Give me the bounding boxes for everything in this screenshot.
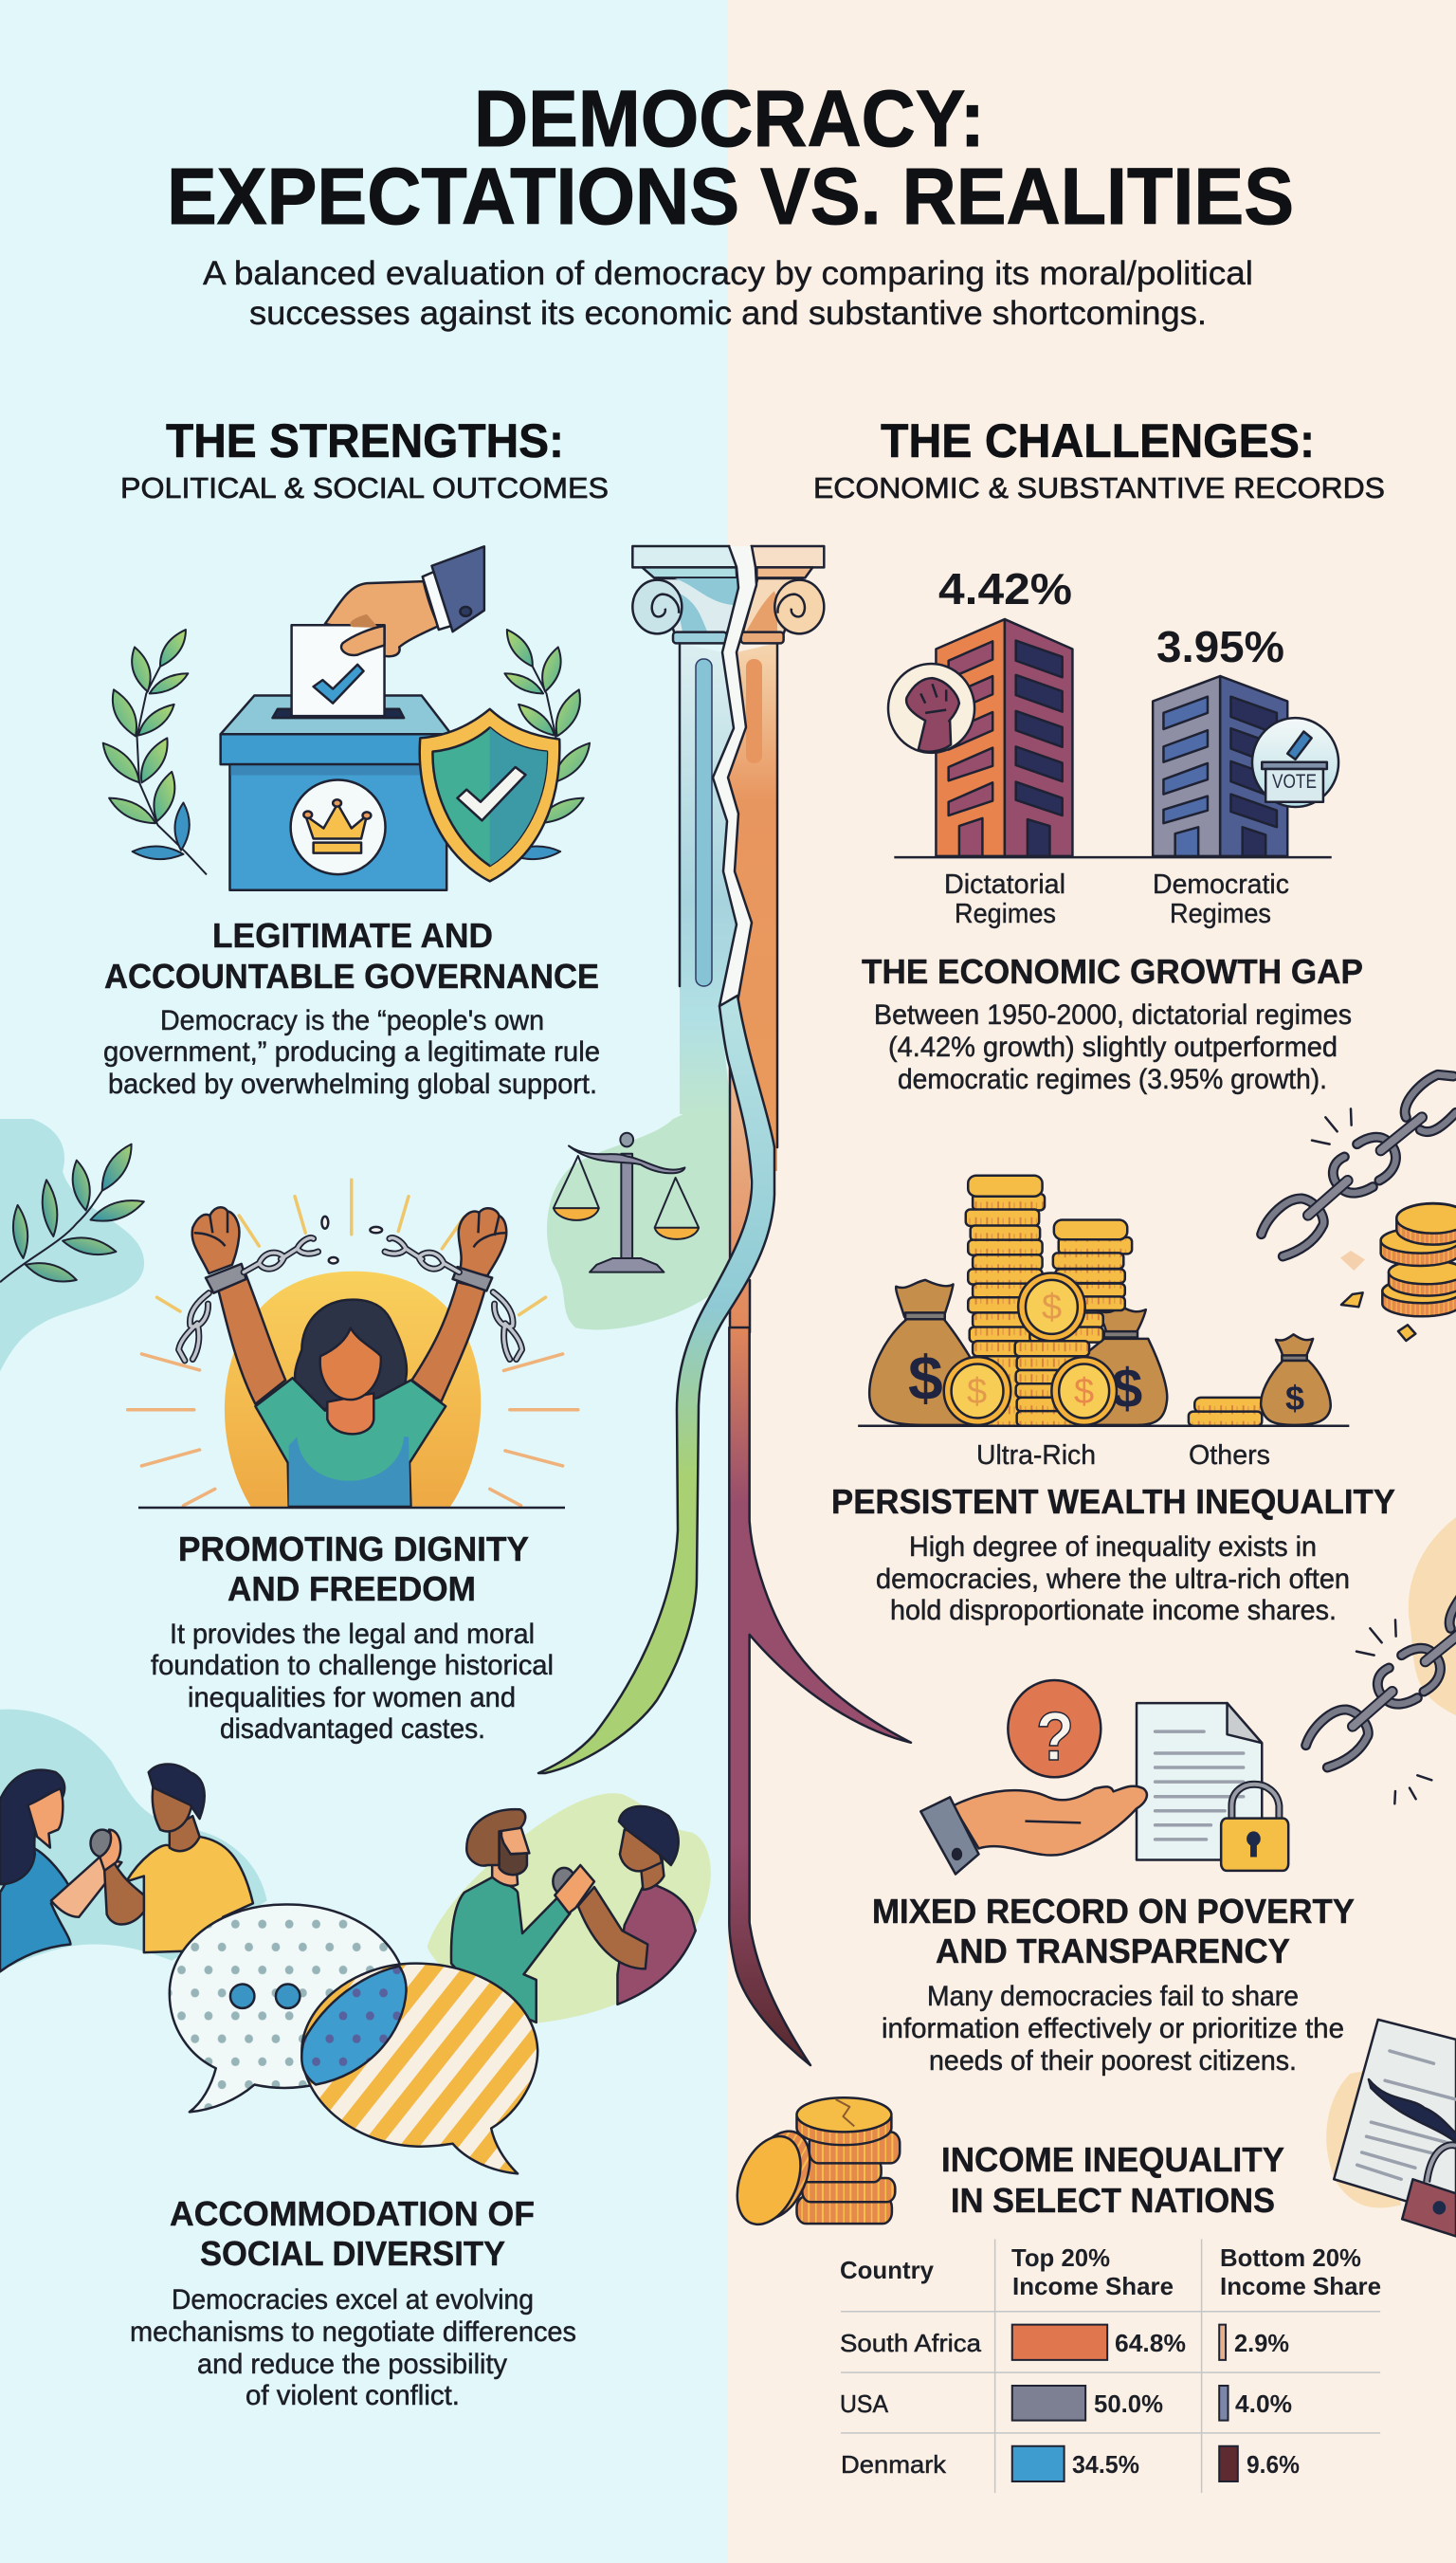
icon: chains on wrists (179, 1238, 522, 1361)
table: top 20 values (1072, 2329, 1186, 2479)
table: grid lines and bars (841, 2239, 1380, 2493)
text: vote label: VOTE (1272, 771, 1317, 793)
panel: accommodation of social diversity (0, 1710, 711, 2411)
table: header: Income Share (1220, 2272, 1381, 2300)
heading: the strengths: THE STRENGTHS: (166, 414, 564, 467)
icon: laurel left (103, 630, 207, 874)
text: diversity body (130, 2284, 576, 2411)
icon: money bags and coin stacks: $ (1112, 1358, 1142, 1419)
table: header: Bottom 20% (1220, 2243, 1361, 2272)
column: crack (713, 546, 756, 1006)
title: DEMOCRACY: (474, 74, 985, 163)
icon: coin stack (724, 2097, 900, 2239)
icon: leaf branch (0, 1144, 144, 1282)
text: dignity body (151, 1619, 554, 1745)
blob: peach upper right (1409, 1517, 1456, 1715)
heading: income inequality (941, 2140, 1284, 2220)
text: dictatorial value: 4.42% (938, 564, 1072, 613)
text: democratic axis label: Regimes (1170, 899, 1271, 929)
table: top 20 values: 64.8% (1115, 2329, 1186, 2357)
text: wealth body: democracies, where the ultra-rich often (876, 1564, 1350, 1595)
text: growth gap body: democratic regimes (3.95% growth). (898, 1064, 1327, 1095)
icon: money bags and coin stacks: $ (967, 1372, 987, 1412)
text: democratic axis label: Democratic (1153, 870, 1289, 900)
column: left shaft (680, 643, 737, 1114)
column: right shaft (728, 643, 777, 1171)
table: top 20 values: 50.0% (1094, 2389, 1163, 2418)
trunk: maroon fork (729, 1327, 911, 2065)
icon: broken chain lower right (1306, 1592, 1456, 1803)
heading: income inequality: IN SELECT NATIONS (951, 2181, 1275, 2220)
bar: denmark top 20 (1012, 2446, 1065, 2481)
text: democratic value: 3.95% (1156, 622, 1284, 671)
icon: broken chain upper right (1262, 1074, 1456, 1256)
table: bottom 20 values: 4.0% (1235, 2389, 1292, 2418)
background: right challenges side (728, 0, 1456, 2563)
ground line (138, 1507, 565, 1509)
heading: the strengths (120, 414, 609, 504)
table: country names: Denmark (841, 2450, 947, 2479)
table: country names (840, 2329, 982, 2479)
bar: south africa top 20 (1012, 2325, 1107, 2360)
icon: money bags and coin stacks: $ (1285, 1379, 1304, 1418)
heading: economic growth gap: THE ECONOMIC GROWTH GAP (862, 952, 1363, 991)
text: growth gap body: (4.42% growth) slightly outperformed (888, 1032, 1338, 1063)
icon: overlapping speech bubbles (170, 1904, 537, 2173)
bar: south africa bottom 20 (1219, 2325, 1226, 2360)
table: bottom 20 values (1234, 2329, 1300, 2479)
panel: economic growth gap (862, 564, 1363, 1095)
icon: woman breaking chains (128, 1180, 578, 1507)
icon: money bags and coin stacks (858, 1176, 1349, 1426)
heading: diversity: SOCIAL DIVERSITY (200, 2234, 505, 2273)
heading: poverty and transparency: MIXED RECORD ON POVERTY (872, 1892, 1355, 1931)
text: dignity body: foundation to challenge historical (151, 1650, 554, 1681)
panel: mixed record on poverty and transparency (872, 1680, 1355, 2077)
text: ultra-rich label: Ultra-Rich (976, 1440, 1096, 1471)
text: democratic axis label (1153, 870, 1289, 929)
subtitle: A balanced evaluation of democracy by comparing its moral/political (203, 255, 1253, 292)
heading: the challenges: THE CHALLENGES: (881, 414, 1315, 467)
blob: peach lower right (1326, 2068, 1401, 2207)
table: country names: South Africa (840, 2329, 982, 2357)
text: legitimate body (103, 1005, 600, 1100)
heading: dignity: PROMOTING DIGNITY (178, 1529, 529, 1568)
icon: left pair of people (0, 1710, 267, 1971)
icon: redacted document with lock (1334, 2020, 1456, 2236)
table: header: Country (840, 2256, 935, 2284)
text: diversity body: mechanisms to negotiate differences (130, 2316, 576, 2348)
icon: scales of justice (554, 1133, 699, 1272)
table: top 20 values: 34.5% (1072, 2450, 1139, 2479)
panel: legitimate and accountable governance (103, 546, 600, 1100)
text: diversity body: Democracies excel at evolving (172, 2284, 534, 2316)
heading: poverty and transparency: AND TRANSPARENCY (936, 1931, 1290, 1970)
table: header (840, 2243, 1381, 2300)
text: dignity body: disadvantaged castes. (220, 1713, 485, 1745)
icon: hand, question mark, document and padlock (920, 1680, 1288, 1875)
icon: ballot box with hand and shield (221, 546, 559, 890)
table: bottom 20 values: 2.9% (1234, 2329, 1289, 2357)
text: poverty body: needs of their poorest citizens. (929, 2045, 1297, 2077)
text: poverty body: information effectively or prioritize the (882, 2013, 1344, 2044)
text: dictatorial axis label: Dictatorial (944, 870, 1065, 900)
text: wealth body: hold disproportionate income shares. (890, 1595, 1337, 1626)
heading: dignity (178, 1529, 529, 1608)
table: header: Top 20% (1011, 2243, 1110, 2272)
text: legitimate body: Democracy is the “people's own (160, 1005, 544, 1036)
text: dictatorial axis label (944, 870, 1065, 929)
heading: legitimate: LEGITIMATE AND (212, 916, 493, 955)
panel: income inequality table (724, 2097, 1381, 2493)
text: dignity body: It provides the legal and moral (170, 1619, 535, 1650)
icon: money bags and coin stacks: $ (1042, 1288, 1062, 1327)
heading: income inequality: INCOME INEQUALITY (941, 2140, 1284, 2179)
blob: top left leaf backdrop (0, 1119, 144, 1371)
ribbon: blue to green (538, 996, 774, 1773)
heading: wealth inequality: PERSISTENT WEALTH INEQUALITY (831, 1482, 1395, 1521)
heading: dignity: AND FREEDOM (228, 1569, 476, 1608)
heading: the challenges (813, 414, 1385, 504)
title: EXPECTATIONS VS. REALITIES (167, 152, 1294, 241)
heading: legitimate (104, 916, 599, 996)
panel: promoting dignity and freedom (0, 1144, 578, 1745)
subtitle (203, 255, 1253, 332)
heading: diversity: ACCOMMODATION OF (170, 2194, 535, 2233)
table: country names: USA (840, 2389, 889, 2418)
icon: coin stack upper right (1340, 1203, 1456, 1341)
table: header: Income Share (1012, 2272, 1174, 2300)
heading: the challenges: ECONOMIC & SUBSTANTIVE RECORDS (813, 471, 1385, 504)
text: others label: Others (1189, 1440, 1270, 1471)
icon: money bags and coin stacks: $ (1074, 1372, 1094, 1412)
icon: laurel right (504, 630, 590, 859)
icon: right pair of people (428, 1793, 711, 2023)
blob: scales backdrop (547, 1092, 729, 1329)
text: legitimate body: government,” producing a legitimate rule (103, 1036, 600, 1068)
text: wealth body (876, 1531, 1350, 1626)
title (167, 74, 1294, 241)
heading: diversity (170, 2194, 535, 2273)
text: diversity body: and reduce the possibility (197, 2349, 507, 2380)
column: capital (632, 546, 824, 643)
text: legitimate body: backed by overwhelming global support. (108, 1069, 597, 1100)
chart: democratic building (894, 676, 1338, 857)
heading: legitimate: ACCOUNTABLE GOVERNANCE (104, 957, 599, 996)
heading: the strengths: POLITICAL & SOCIAL OUTCOMES (120, 471, 609, 504)
trunk: upper section (730, 1062, 750, 1332)
table: bottom 20 values: 9.6% (1247, 2450, 1300, 2479)
heading: poverty and transparency (872, 1892, 1355, 1970)
text: dignity body: inequalities for women and (188, 1682, 516, 1713)
text: growth gap body: Between 1950-2000, dictatorial regimes (874, 999, 1352, 1031)
icon: money bags and coin stacks: $ (908, 1343, 943, 1413)
text: dictatorial axis label: Regimes (955, 899, 1056, 929)
bar: usa bottom 20 (1219, 2386, 1228, 2421)
subtitle: successes against its economic and substantive shortcomings. (249, 295, 1207, 332)
icon: hand, question mark, document and padlock: ? (1036, 1699, 1074, 1775)
panel: persistent wealth inequality (831, 1176, 1395, 1626)
text: wealth body: High degree of inequality exists in (909, 1531, 1317, 1563)
text: poverty body (882, 1981, 1344, 2077)
text: poverty body: Many democracies fail to share (927, 1981, 1299, 2012)
bar: denmark bottom 20 (1219, 2446, 1238, 2481)
text: growth gap body (874, 999, 1352, 1095)
split column with ribbons and trunk (538, 546, 911, 2065)
text: diversity body: of violent conflict. (246, 2380, 460, 2411)
chart: dictatorial building (888, 619, 1072, 856)
background: left strengths side (0, 0, 728, 2563)
bar: usa top 20 (1012, 2386, 1085, 2421)
